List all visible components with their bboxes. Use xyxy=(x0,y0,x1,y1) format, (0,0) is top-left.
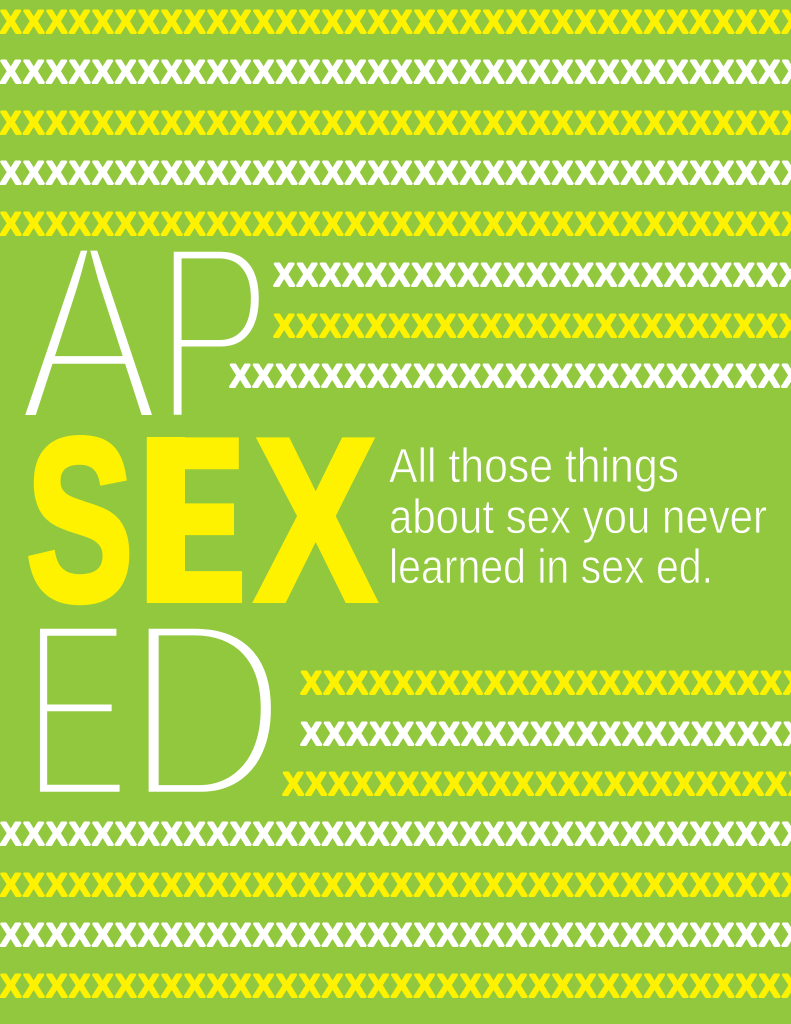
top X rows xyxy=(0,4,791,242)
title word: ED: E xyxy=(23,569,130,853)
subtitle: learned in sex ed. xyxy=(389,541,713,594)
bottom X rows xyxy=(0,816,791,1004)
title word: ED: D xyxy=(125,567,287,852)
subtitle xyxy=(389,440,767,594)
subtitle: All those things xyxy=(389,440,679,493)
title word: AP: A xyxy=(18,190,159,475)
title word: AP: P xyxy=(155,192,272,476)
title word: SEX: S xyxy=(26,391,134,650)
X rows beside ED xyxy=(282,665,791,802)
title word: SEX xyxy=(26,391,376,650)
title word: AP xyxy=(18,190,272,476)
title word: SEX: X xyxy=(255,391,376,650)
title word: SEX: E xyxy=(138,391,246,650)
title word: ED xyxy=(23,567,287,853)
X rows beside AP xyxy=(230,257,791,394)
